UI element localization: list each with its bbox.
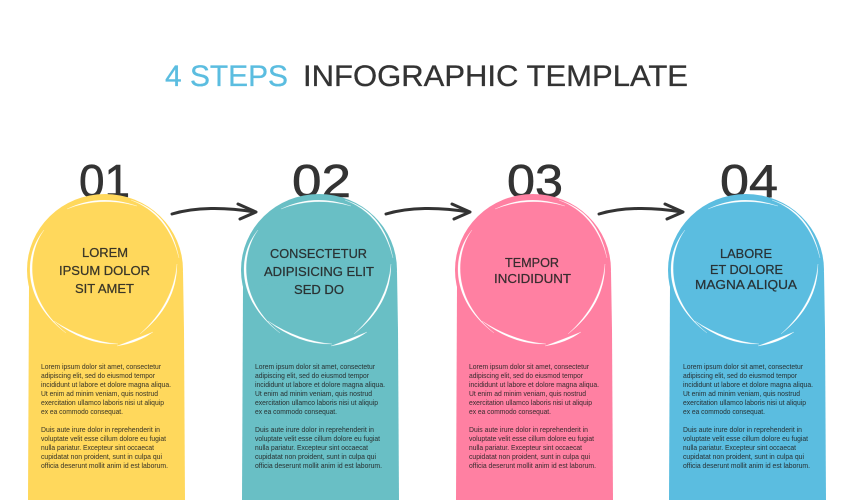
step 4 body text: Ut enim ad minim veniam, quis nostrud <box>683 389 800 398</box>
step 3 body text: incididunt ut labore et dolore magna aliqua. <box>469 380 599 389</box>
step 1 body text: Lorem ipsum dolor sit amet, consectetur <box>41 362 161 371</box>
step 2 heading: CONSECTETUR <box>270 247 367 261</box>
step 1 heading: IPSUM DOLOR <box>59 264 150 278</box>
step 4 body text: incididunt ut labore et dolore magna aliqua. <box>683 380 813 389</box>
step 4 body text: nulla pariatur. Excepteur sint occaecat <box>683 443 796 452</box>
step 2 heading: SED DO <box>294 283 344 297</box>
step 4 heading: ET DOLORE <box>710 263 783 277</box>
step 3 panel <box>455 155 613 500</box>
arrow 1 to 2 <box>172 204 256 219</box>
step 4 shape <box>668 194 826 500</box>
step 1 body text: nulla pariatur. Excepteur sint occaecat <box>41 443 154 452</box>
step 1 body text <box>41 362 171 470</box>
step 2 body text: ex ea commodo consequat. <box>255 407 337 416</box>
title <box>165 60 688 93</box>
step 1 body text: incididunt ut labore et dolore magna aliqua. <box>41 380 171 389</box>
step 3 heading: TEMPOR <box>505 256 559 270</box>
step 2 body text: cupidatat non proident, sunt in culpa qui <box>255 452 376 461</box>
step 3 scribble ring <box>458 200 607 346</box>
step 4 body text <box>683 362 813 470</box>
step 3 body text <box>469 362 599 470</box>
step 3 body text: ex ea commodo consequat. <box>469 407 551 416</box>
step 1 body text: Duis aute irure dolor in reprehenderit in <box>41 425 160 434</box>
step 2 body text: exercitation ullamco laboris nisi ut aliquip <box>255 398 378 407</box>
step 4 body text: adipiscing elit, sed do eiusmod tempor <box>683 371 797 380</box>
step 4 number: 04 <box>720 155 778 207</box>
step 1 number: 01 <box>79 155 130 207</box>
step 4 heading <box>695 247 798 292</box>
step 4 body text: exercitation ullamco laboris nisi ut aliquip <box>683 398 806 407</box>
step 1 panel <box>27 155 185 500</box>
step 2 body text: voluptate velit esse cillum dolore eu fugiat <box>255 434 380 443</box>
step 3 body text: Ut enim ad minim veniam, quis nostrud <box>469 389 586 398</box>
step 1 shape <box>27 194 185 500</box>
step 4 panel <box>668 155 826 500</box>
step 4 body text: Duis aute irure dolor in reprehenderit in <box>683 425 802 434</box>
step 1 body text: Ut enim ad minim veniam, quis nostrud <box>41 389 158 398</box>
step 3 body text: officia deserunt mollit anim id est laborum. <box>469 461 596 470</box>
step 1 body text: ex ea commodo consequat. <box>41 407 123 416</box>
step 1 heading: LOREM <box>82 246 128 260</box>
step 2 panel <box>241 155 399 500</box>
step 3 body text: voluptate velit esse cillum dolore eu fugiat <box>469 434 594 443</box>
step 2 shape <box>241 194 399 500</box>
step 3 body text: adipiscing elit, sed do eiusmod tempor <box>469 371 583 380</box>
step 3 body text: nulla pariatur. Excepteur sint occaecat <box>469 443 582 452</box>
step 3 body text: Duis aute irure dolor in reprehenderit in <box>469 425 588 434</box>
step 4 body text: Lorem ipsum dolor sit amet, consectetur <box>683 362 803 371</box>
step 2 heading <box>264 247 374 297</box>
step 2 body text: officia deserunt mollit anim id est laborum. <box>255 461 382 470</box>
step 2 body text: Lorem ipsum dolor sit amet, consectetur <box>255 362 375 371</box>
step 3 body text: exercitation ullamco laboris nisi ut aliquip <box>469 398 592 407</box>
arrow 3 to 4 <box>599 204 683 219</box>
step 2 scribble ring <box>244 200 393 346</box>
arrow 2 to 3 <box>386 204 470 219</box>
step 1 body text: adipiscing elit, sed do eiusmod tempor <box>41 371 155 380</box>
step 4 body text: voluptate velit esse cillum dolore eu fugiat <box>683 434 808 443</box>
step 4 heading: LABORE <box>720 247 772 261</box>
step 3 number: 03 <box>507 155 563 207</box>
step 1 body text: officia deserunt mollit anim id est laborum. <box>41 461 168 470</box>
step 2 body text: nulla pariatur. Excepteur sint occaecat <box>255 443 368 452</box>
step 3 body text: cupidatat non proident, sunt in culpa qui <box>469 452 590 461</box>
step 2 body text: Ut enim ad minim veniam, quis nostrud <box>255 389 372 398</box>
step 3 heading <box>494 256 571 286</box>
step 4 scribble ring <box>671 200 820 346</box>
step 2 body text <box>255 362 385 470</box>
step 1 body text: voluptate velit esse cillum dolore eu fugiat <box>41 434 166 443</box>
title: 4 STEPS <box>165 60 288 93</box>
step 2 body text: incididunt ut labore et dolore magna aliqua. <box>255 380 385 389</box>
step 1 scribble ring <box>30 200 179 346</box>
step 1 body text: exercitation ullamco laboris nisi ut aliquip <box>41 398 164 407</box>
step 4 body text: cupidatat non proident, sunt in culpa qui <box>683 452 804 461</box>
step 1 body text: cupidatat non proident, sunt in culpa qui <box>41 452 162 461</box>
step 2 body text: Duis aute irure dolor in reprehenderit in <box>255 425 374 434</box>
step 3 heading: INCIDIDUNT <box>494 272 571 286</box>
step 4 heading: MAGNA ALIQUA <box>695 278 798 292</box>
step 3 shape <box>455 194 613 500</box>
step 2 body text: adipiscing elit, sed do eiusmod tempor <box>255 371 369 380</box>
step 3 body text: Lorem ipsum dolor sit amet, consectetur <box>469 362 589 371</box>
step 2 heading: ADIPISICING ELIT <box>264 265 374 279</box>
step 1 heading <box>59 246 150 296</box>
step 2 number: 02 <box>292 155 351 207</box>
step 1 heading: SIT AMET <box>75 282 134 296</box>
step 4 body text: officia deserunt mollit anim id est laborum. <box>683 461 810 470</box>
title: INFOGRAPHIC TEMPLATE <box>303 60 688 93</box>
step 4 body text: ex ea commodo consequat. <box>683 407 765 416</box>
